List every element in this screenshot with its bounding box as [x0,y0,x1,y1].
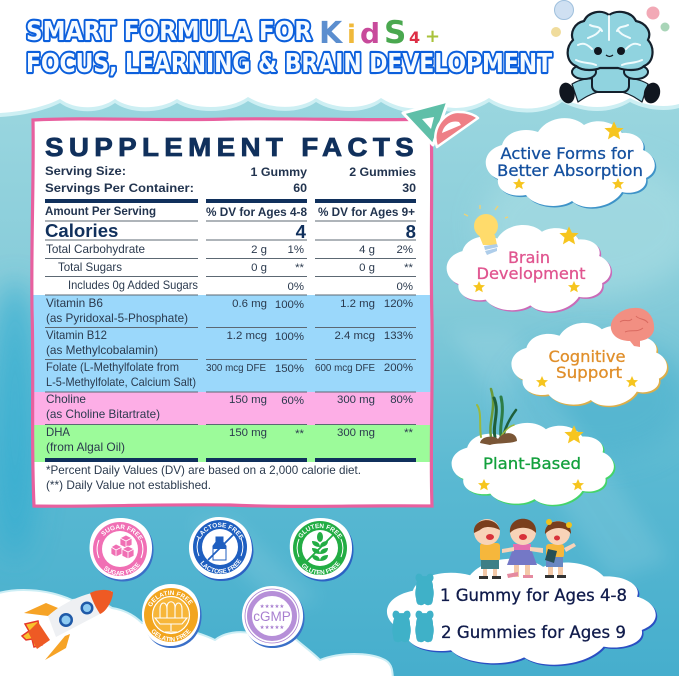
badge: cgmp: ★★★★★ [260,603,284,610]
background: light patches [0,155,679,610]
callout: active forms [486,118,656,209]
icon: brain mascot [551,0,670,105]
callout: dosage cloud: 2 Gummies for Ages 9 [441,623,626,642]
row: added sugars [68,279,413,293]
row: choline: 60% [281,395,304,407]
serving information: 30 [402,181,416,195]
row: total carbohydrate: Total Carbohydrate [46,243,145,256]
badge: cgmp: cGMP [253,609,291,624]
callout: active forms: Active Forms for [500,144,634,163]
footnotes [46,464,361,492]
row: added sugars: Includes 0g Added Sugars [68,279,198,292]
kid 2 [502,519,543,578]
badge: lactose free: LACTOSE FREE [200,558,242,574]
badge: cgmp: ★★★★★ [260,624,284,631]
row: vitamin b6: Vitamin B6 [46,297,103,310]
title [26,15,552,79]
row: calories [45,220,416,242]
top white header with wave edge [0,0,679,117]
callout: plant-based: Plant-Based [483,454,581,473]
bottom white cloud [0,590,393,676]
word: kids 4+: 4 [409,28,420,47]
row: vitamin b6: 120% [384,298,413,310]
row: vitamin b6: 1.2 mg [340,298,375,310]
footnotes: *Percent Daily Values (DV) are based on a 2,000 calorie diet. [46,464,361,477]
heading: supplement facts: SUPPLEMENT FACTS [45,132,419,162]
callout: dosage cloud: 1 Gummy for Ages 4-8 [440,586,627,605]
row: dha: 150 mg [229,427,267,439]
row: vitamin b12: 1.2 mcg [226,330,267,342]
row: vitamin b12: 2.4 mcg [334,330,375,342]
kid 3 [545,519,576,578]
badge: gelatin free [142,584,202,648]
badge: gluten free [290,518,354,582]
word: kids 4+: S [384,15,406,51]
word: kids 4+: i [347,20,356,50]
icon: wheat [312,532,328,561]
row: dha: (from Algal Oil) [46,441,125,454]
row: choline: 80% [390,394,413,406]
badge: lactose free: LACTOSE FREE [196,522,244,540]
row: added sugars: 0% [397,281,413,293]
badge: gluten free: GLUTEN FREE [298,524,342,539]
row: calories: Calories [45,220,118,241]
icon: one gummy bear [415,574,434,605]
row: total sugars: 0 g [251,262,267,274]
row: dha [46,426,414,454]
badge: gelatin free: GELATIN FREE [152,628,191,642]
icon: rocket [22,590,113,660]
row: choline: 150 mg [229,394,267,406]
row: total sugars: 0 g [359,262,375,274]
row: total sugars [58,261,414,274]
icon: algae [477,389,517,445]
callout: dosage cloud [387,559,657,666]
badge: lactose free [188,517,254,581]
serving information: Servings Per Container: [45,181,194,195]
bubbles [551,0,670,37]
icon: two gummy bears [392,611,434,642]
badge: gelatin free: GELATIN FREE [148,590,193,606]
row: total carbohydrate [46,243,413,256]
row: vitamin b6: (as Pyridoxal-5-Phosphate) [46,312,188,325]
row: dha: DHA [46,426,70,439]
panel: supplement facts [32,119,432,506]
row: calories: 4 [296,221,307,242]
row: choline: 300 mg [337,394,375,406]
callout: cognitive support [511,308,668,407]
row: dha: ** [295,428,305,440]
row: choline [46,393,413,421]
row: dha: 300 mg [337,427,375,439]
word: kids 4+: d [360,17,380,50]
callout: cognitive support: Support [556,363,622,382]
row: amount per serving: % DV for Ages 4-8 [206,205,307,219]
panel background and colour bands [32,119,432,506]
row: folate: Folate (L-Methylfolate from [46,361,179,374]
icon: sugar cubes [111,535,134,559]
row: folate: 600 mcg DFE [315,363,375,374]
row: total carbohydrate: 2% [397,244,413,256]
row: vitamin b12: 100% [275,331,304,343]
serving information [45,164,416,195]
row: total carbohydrate: 2 g [251,244,267,256]
row: amount per serving: Amount Per Serving [45,204,156,218]
row: vitamin b12: Vitamin B12 [46,329,107,342]
row: total carbohydrate: 1% [288,244,304,256]
serving information: 60 [293,181,307,195]
callout: brain development [447,205,612,313]
callout: brain development: Brain [508,248,550,267]
serving information: 1 Gummy [251,165,307,179]
icon: milk bottle [213,537,226,560]
row: folate [46,361,413,389]
title line 1: SMART FORMULA FOR [26,17,312,47]
icon: ruler triangle and protractor [403,101,478,147]
table rules [45,199,416,462]
callout: cognitive support: Cognitive [548,347,626,366]
row: folate: L-5-Methylfolate, Calcium Salt) [46,376,196,389]
badge: sugar free: SUGAR FREE [101,524,143,540]
row: total sugars: ** [295,262,305,274]
row: vitamin b6 [46,297,413,325]
callout: active forms: Better Absorption [497,161,643,180]
row: vitamin b12: 133% [384,330,413,342]
row: total sugars: ** [404,262,414,274]
badge: sugar free [90,518,154,582]
row: vitamin b12: (as Methylcobalamin) [46,344,158,357]
icon: three kids [474,519,576,579]
row: amount per serving: % DV for Ages 9+ [318,205,415,219]
icon: light bulb [464,205,508,255]
row: vitamin b12 [46,329,413,357]
row: folate: 300 mcg DFE [206,363,266,374]
row: calories: 8 [406,221,416,242]
serving information: 2 Gummies [349,165,416,179]
row: dha: ** [404,427,414,439]
row: added sugars: 0% [288,281,304,293]
word: kids 4+: + [425,26,440,47]
row: vitamin b6: 0.6 mg [232,298,267,310]
callout: plant-based [452,389,615,506]
title line 2: FOCUS, LEARNING & BRAIN DEVELOPMENT [26,49,552,79]
callout: brain development: Development [476,264,586,283]
kid 1 [474,519,501,579]
icon: pink brain [611,308,654,347]
row: folate: 200% [384,362,413,374]
serving information: Serving Size: [45,164,126,178]
row: total carbohydrate: 4 g [359,244,375,256]
badge: cgmp [242,586,305,648]
row: vitamin b6: 100% [275,299,304,311]
badge: gluten free: GLUTEN FREE [302,561,340,575]
row: amount per serving [45,204,415,219]
icon: gelatin dessert [155,602,187,632]
word: kids 4+ [319,15,440,51]
footnotes: (**) Daily Value not established. [46,479,211,492]
word: kids 4+: K [319,16,344,51]
row: total sugars: Total Sugars [58,261,122,274]
badge: sugar free: SUGAR FREE [104,562,140,576]
row: choline: Choline [46,393,86,406]
row: folate: 150% [275,363,304,375]
row: choline: (as Choline Bitartrate) [46,408,160,421]
